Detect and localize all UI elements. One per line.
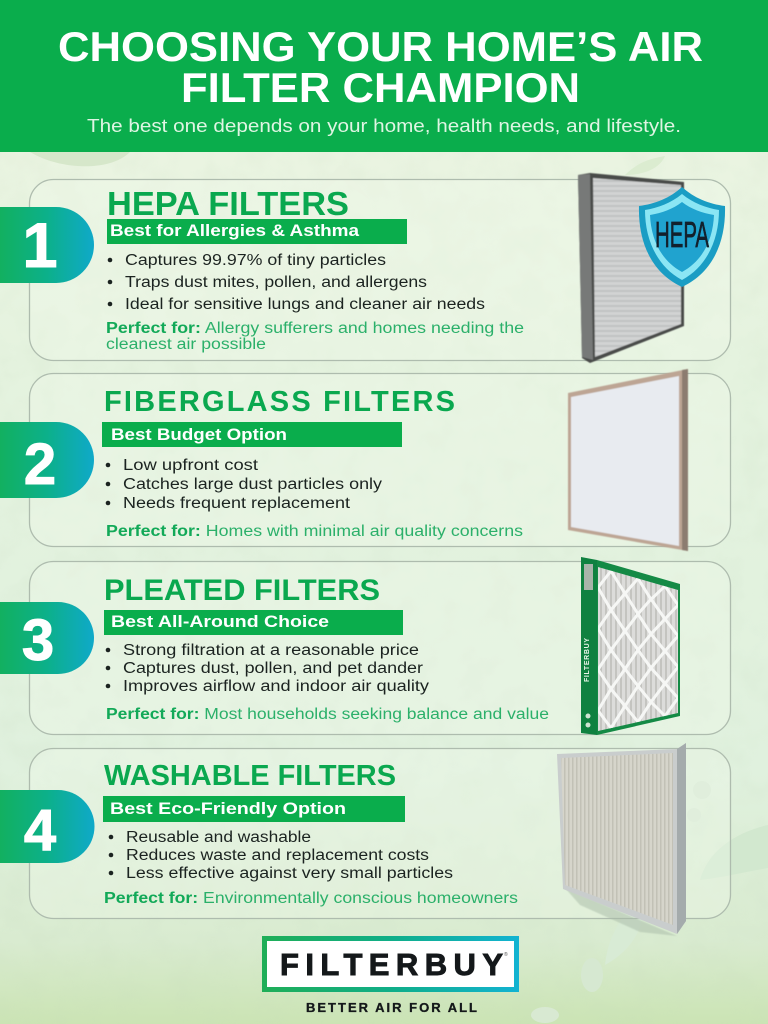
- number badge 3: 3: [22, 608, 54, 673]
- filter image: HEPA: [578, 173, 684, 363]
- perfect for: Perfect for: Allergy sufferers and homes needing the: [106, 320, 524, 337]
- bullet list: [109, 829, 453, 882]
- number badge 1: [0, 207, 94, 283]
- subheading bar: [103, 796, 405, 822]
- bullet list: Ideal for sensitive lungs and cleaner air needs: [125, 296, 485, 313]
- panel: washable filters: [0, 743, 730, 936]
- bullet list: [106, 457, 382, 512]
- perfect for: cleanest air possible: [106, 336, 266, 353]
- filter image: washable: [557, 743, 686, 936]
- logo: Filterbuy: FILTERBUY: [280, 947, 503, 982]
- subtitle: The best one depends on your home, health needs, and lifestyle.: [87, 116, 681, 136]
- bullet list: Reusable and washable: [126, 829, 311, 846]
- panel: pleated filters: [0, 557, 730, 735]
- bullet list: Traps dust mites, pollen, and allergens: [125, 274, 427, 291]
- bullet list: Captures 99.97% of tiny particles: [125, 252, 386, 269]
- perfect for: Perfect for: Homes with minimal air quality concerns: [106, 523, 523, 540]
- title: FILTER CHAMPION: [181, 64, 580, 111]
- tagline: BETTER AIR FOR ALL: [306, 1000, 477, 1015]
- perfect for: Perfect for: Most households seeking balance and value: [106, 706, 549, 723]
- header band: [0, 0, 768, 152]
- number badge 1: 1: [22, 211, 58, 281]
- subheading bar: [102, 422, 402, 447]
- heading: WASHABLE FILTERS: [104, 760, 396, 792]
- subheading bar: [104, 610, 403, 635]
- bullet list: Low upfront cost: [123, 457, 259, 474]
- number badge 4: 4: [24, 798, 56, 863]
- bullet list: Less effective against very small particles: [126, 865, 453, 882]
- bullet list: Catches large dust particles only: [123, 476, 382, 493]
- bullet list: [108, 252, 485, 313]
- filter image: pleated: [581, 557, 680, 735]
- perfect for: [106, 320, 524, 353]
- bullet list: [106, 642, 429, 695]
- heading: PLEATED FILTERS: [104, 574, 380, 607]
- subheading bar: Best Eco-Friendly Option: [110, 799, 346, 818]
- panel: fiberglass filters: [0, 369, 730, 551]
- number badge 2: 2: [24, 432, 56, 497]
- bullet list: Needs frequent replacement: [123, 495, 351, 512]
- subheading bar: [107, 219, 407, 244]
- subheading bar: Best All-Around Choice: [111, 612, 329, 631]
- bullet list: Improves airflow and indoor air quality: [123, 678, 429, 695]
- subheading bar: Best for Allergies & Asthma: [110, 221, 360, 240]
- title: [58, 23, 703, 111]
- filter image: pleated: FILTERBUY: [584, 638, 591, 682]
- heading: FIBERGLASS FILTERS: [104, 386, 455, 418]
- title: CHOOSING YOUR HOME’S AIR: [58, 23, 703, 70]
- filter image: fiberglass: [568, 369, 688, 551]
- perfect for: Perfect for: Environmentally conscious homeowners: [104, 890, 518, 907]
- panel: HEPA filters: [0, 173, 730, 363]
- number badge 3: [0, 602, 94, 674]
- logo: Filterbuy: [262, 936, 519, 992]
- heading: HEPA FILTERS: [107, 185, 349, 222]
- subheading bar: Best Budget Option: [111, 425, 287, 444]
- icon: HEPA shield: [639, 187, 725, 287]
- bullet list: Strong filtration at a reasonable price: [123, 642, 419, 659]
- number badge 4: [0, 790, 95, 863]
- bullet list: Reduces waste and replacement costs: [126, 847, 429, 864]
- bullet list: Captures dust, pollen, and pet dander: [123, 660, 423, 677]
- logo: Filterbuy: ®: [504, 951, 508, 958]
- icon: HEPA shield: HEPA: [655, 214, 709, 255]
- number badge 2: [0, 422, 94, 498]
